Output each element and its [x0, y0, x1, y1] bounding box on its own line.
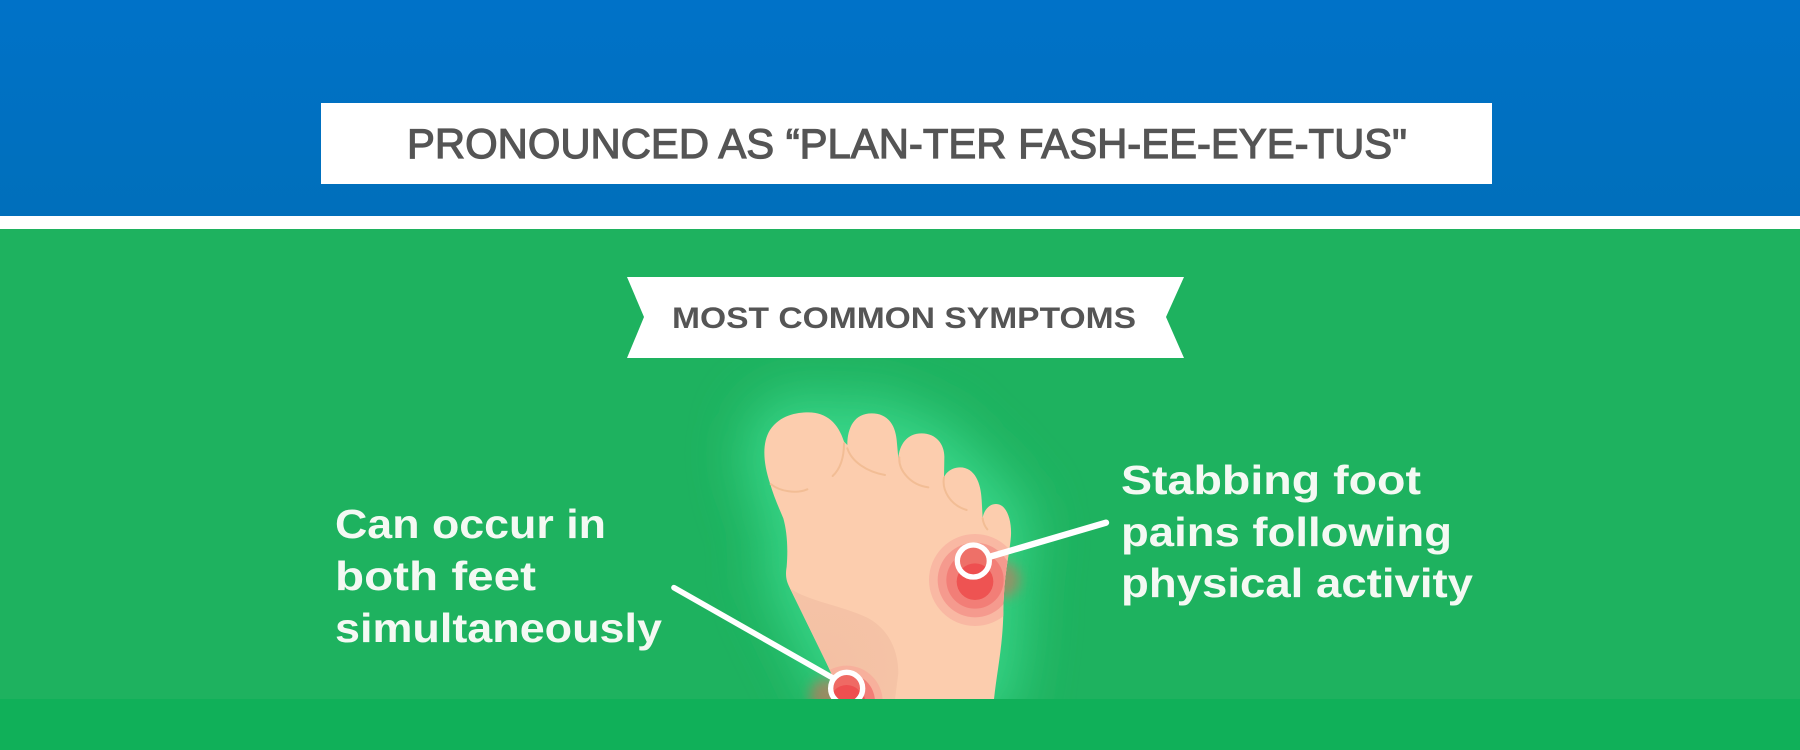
- green symptoms panel: [0, 229, 1800, 750]
- text: stabbing foot pains: [1121, 457, 1473, 606]
- pain point: forefoot rings: [929, 534, 1008, 626]
- blue header band: [0, 0, 1800, 216]
- text: can occur in both feet: [335, 501, 662, 651]
- text: can occur in both feet: Can occur in: [335, 501, 606, 547]
- text: can occur in both feet: simultaneously: [335, 605, 662, 651]
- symptoms ribbon heading: [627, 277, 1184, 358]
- callout leader: stabbing pains: [954, 520, 1110, 580]
- text: stabbing foot pains: Stabbing foot: [1121, 457, 1421, 503]
- pronunciation banner: [321, 103, 1492, 184]
- text: stabbing foot pains: physical activity: [1121, 560, 1473, 606]
- symptoms ribbon heading: MOST COMMON SYMPTOMS: [672, 302, 1136, 335]
- foot illustration: [764, 412, 1020, 712]
- pain point: heel rings: [830, 666, 882, 699]
- callout leader: both feet: [674, 588, 863, 718]
- text: can occur in both feet: both feet: [335, 553, 536, 599]
- text: stabbing foot pains: pains following: [1121, 509, 1452, 555]
- bottom green strip: [0, 699, 1800, 750]
- pronunciation banner: PRONOUNCED AS “PLAN-TER FASH-EE-EYE-TUS": [407, 120, 1407, 167]
